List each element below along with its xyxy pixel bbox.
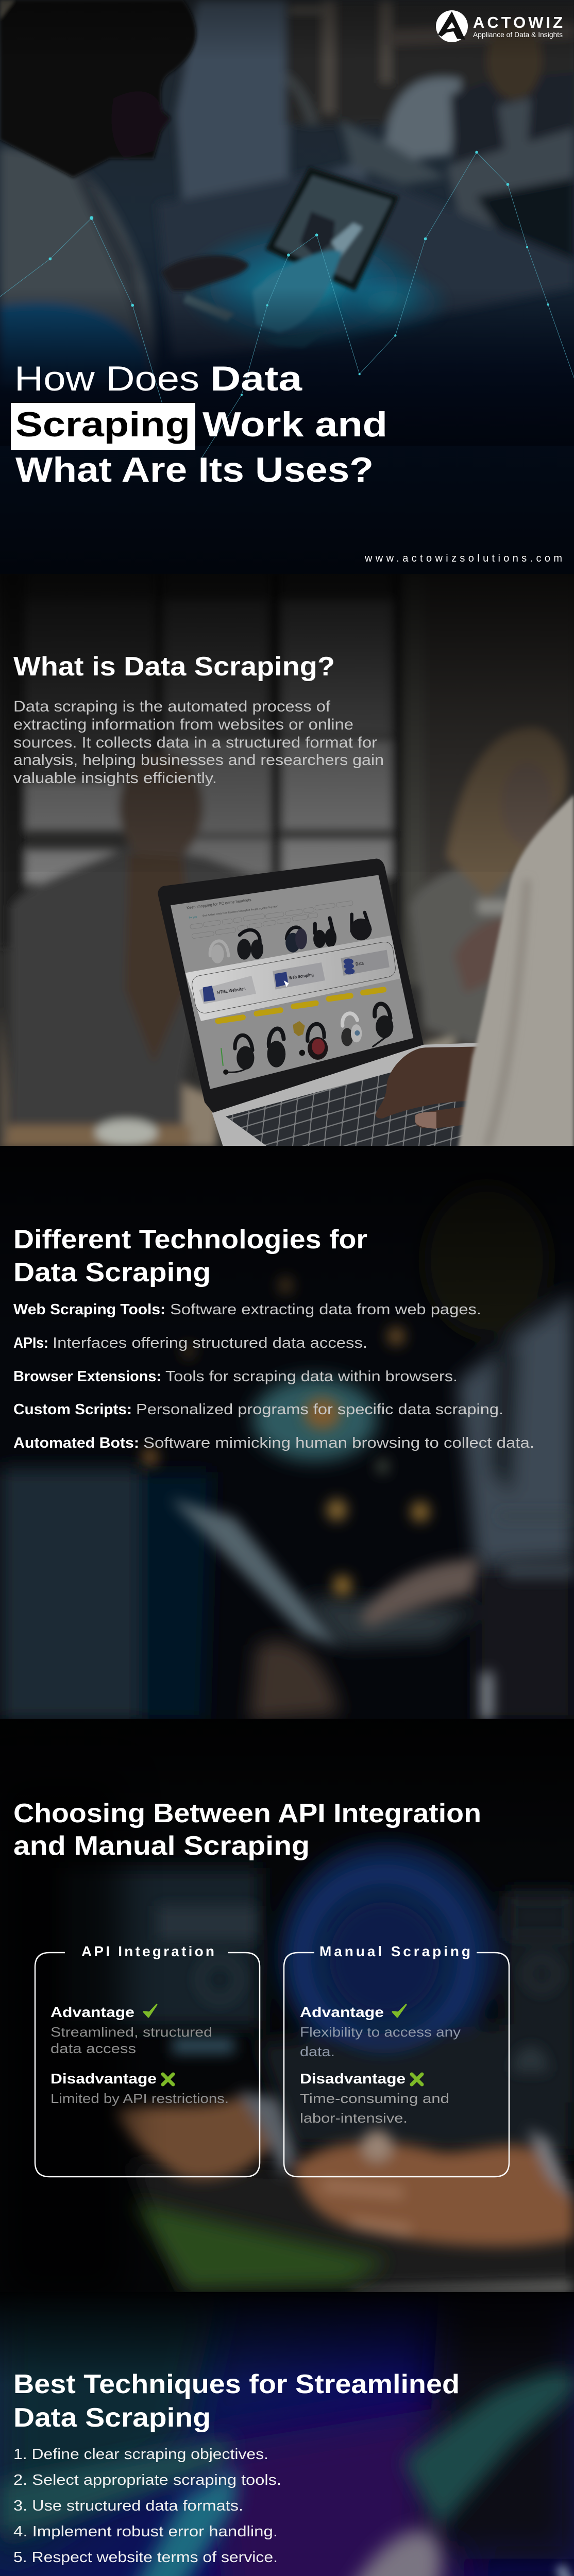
- heading: api vs manual: and Manual Scraping: [13, 1831, 310, 1861]
- logo: top: ACTOWIZ: [473, 13, 563, 31]
- step: data: Data: [355, 960, 364, 967]
- list: technologies: Custom Scripts:: [13, 1401, 132, 1418]
- list: technologies: Software extracting data from web pages.: [170, 1301, 481, 1318]
- website url: www.actowizsolutions.com: [364, 553, 562, 564]
- title: Work and: [202, 405, 387, 444]
- step: html websites: [199, 976, 256, 1004]
- headphones bottom row: [221, 1004, 393, 1075]
- lid: [158, 859, 424, 1113]
- card outline: [284, 1953, 509, 2177]
- list: technologies: Software mimicking human browsing to collect data.: [143, 1435, 534, 1451]
- laptop: [158, 859, 481, 1146]
- step: web scraping: [273, 962, 325, 990]
- card: manual scraping: [284, 1943, 509, 2177]
- text block: definition: [13, 698, 384, 787]
- title highlight box: [11, 403, 195, 450]
- heading: best techniques: Best Techniques for Streamlined: [13, 2369, 460, 2399]
- title: Data: [210, 359, 302, 398]
- heading: api vs manual: [13, 1799, 481, 1861]
- card: api integration: [35, 1943, 260, 2177]
- step: web scraping: Web Scraping: [289, 972, 314, 980]
- list: technologies: [13, 1301, 534, 1451]
- panel: best techniques: [0, 2296, 574, 2576]
- chart dots: [48, 151, 549, 396]
- heading: different technologies: Different Technologies for: [13, 1225, 367, 1255]
- step: data: [341, 950, 390, 976]
- heading: what is data scraping: What is Data Scraping?: [13, 652, 335, 682]
- list: technologies: Web Scraping Tools:: [13, 1301, 165, 1318]
- screen header text: Best Sellers Deals New Releases Most gifted Bought together Top rated: [202, 905, 278, 917]
- card: manual scraping: Flexibility to access any: [300, 2024, 461, 2040]
- office photo background: [0, 570, 574, 1174]
- step: html websites: HTML Websites: [217, 986, 246, 995]
- list: techniques: 2. Select appropriate scraping tools.: [13, 2472, 281, 2488]
- screen header text: For you: [189, 916, 197, 919]
- heading: api vs manual: Choosing Between API Integration: [13, 1799, 481, 1828]
- text block: definition: Data scraping is the automated process of: [13, 698, 331, 715]
- list: technologies: Automated Bots:: [13, 1435, 139, 1451]
- icon: cross: [412, 2074, 422, 2084]
- card: api integration: Disadvantage: [50, 2071, 157, 2087]
- card: api integration: data access: [50, 2041, 136, 2056]
- blurred api photo: [0, 1717, 574, 2299]
- band outline: [192, 942, 395, 1013]
- text block: definition: analysis, helping businesses and researchers gain: [13, 752, 384, 769]
- logo: top: [436, 10, 563, 42]
- panel: hero: [0, 0, 574, 574]
- info band: [185, 936, 400, 1021]
- icon: check: [393, 2005, 406, 2017]
- card: manual scraping: labor-intensive.: [300, 2110, 408, 2126]
- card: manual scraping: Advantage: [300, 2004, 384, 2020]
- card: api integration: Streamlined, structured: [50, 2024, 212, 2040]
- list: technologies: Tools for scraping data within browsers.: [165, 1368, 458, 1385]
- list: technologies: Interfaces offering structured data access.: [53, 1335, 367, 1351]
- logo: top: Appliance of Data & Insights: [473, 30, 563, 39]
- filter pills: [190, 901, 353, 939]
- blurred circuit photo: [0, 2287, 574, 2576]
- list: techniques: [13, 2446, 346, 2576]
- text block: definition: sources. It collects data in a structured format for: [13, 734, 377, 751]
- keyboard: [226, 1048, 481, 1146]
- icon: cross: [163, 2074, 173, 2084]
- list: technologies: Browser Extensions:: [13, 1368, 161, 1385]
- panel: different technologies: [0, 1192, 574, 1719]
- title: How Does: [14, 359, 199, 398]
- list: techniques: 3. Use structured data formats.: [13, 2498, 243, 2514]
- card: manual scraping: data.: [300, 2044, 335, 2059]
- title: What Are Its Uses?: [15, 450, 374, 489]
- list: techniques: 1. Define clear scraping objectives.: [13, 2446, 268, 2463]
- text block: definition: extracting information from websites or online: [13, 716, 353, 733]
- blurred technology photo: [0, 1140, 574, 1729]
- screen header text: Keep shopping for PC game headsets: [187, 897, 251, 910]
- card: manual scraping: Time-consuming and: [300, 2091, 449, 2106]
- card: api integration: Advantage: [50, 2004, 134, 2020]
- panel: what is data scraping: [0, 574, 574, 1146]
- icon: check: [144, 2005, 157, 2017]
- chart lines: [0, 152, 574, 459]
- add to cart buttons: [215, 987, 387, 1024]
- hero photo background: [0, 0, 574, 592]
- headphones top row: [210, 912, 372, 963]
- list: techniques: 5. Respect website terms of service.: [13, 2549, 278, 2566]
- panel: api vs manual: [13, 1799, 574, 2292]
- title: [11, 359, 387, 489]
- text block: definition: valuable insights efficiently.: [13, 770, 217, 787]
- card title: Manual Scraping: [319, 1943, 470, 1959]
- heading: best techniques: [13, 2369, 460, 2433]
- laptop deck: [212, 1043, 481, 1146]
- card: api integration: Limited by API restrictions.: [50, 2091, 229, 2106]
- heading: different technologies: Data Scraping: [13, 1258, 211, 1287]
- card title: API Integration: [81, 1943, 214, 1959]
- screen header text: [187, 897, 278, 919]
- list: technologies: Personalized programs for specific data scraping.: [136, 1401, 503, 1418]
- list: technologies: APIs:: [13, 1335, 48, 1351]
- screen: [171, 875, 413, 1089]
- heading: different technologies: [13, 1225, 367, 1287]
- title: Scraping: [15, 405, 190, 444]
- foreground shirt: [458, 794, 574, 1151]
- card: manual scraping: Disadvantage: [300, 2071, 406, 2087]
- heading: best techniques: Data Scraping: [13, 2403, 211, 2433]
- card outline: [35, 1953, 260, 2177]
- hand: [375, 1046, 481, 1129]
- list: techniques: 4. Implement robust error handling.: [13, 2523, 278, 2540]
